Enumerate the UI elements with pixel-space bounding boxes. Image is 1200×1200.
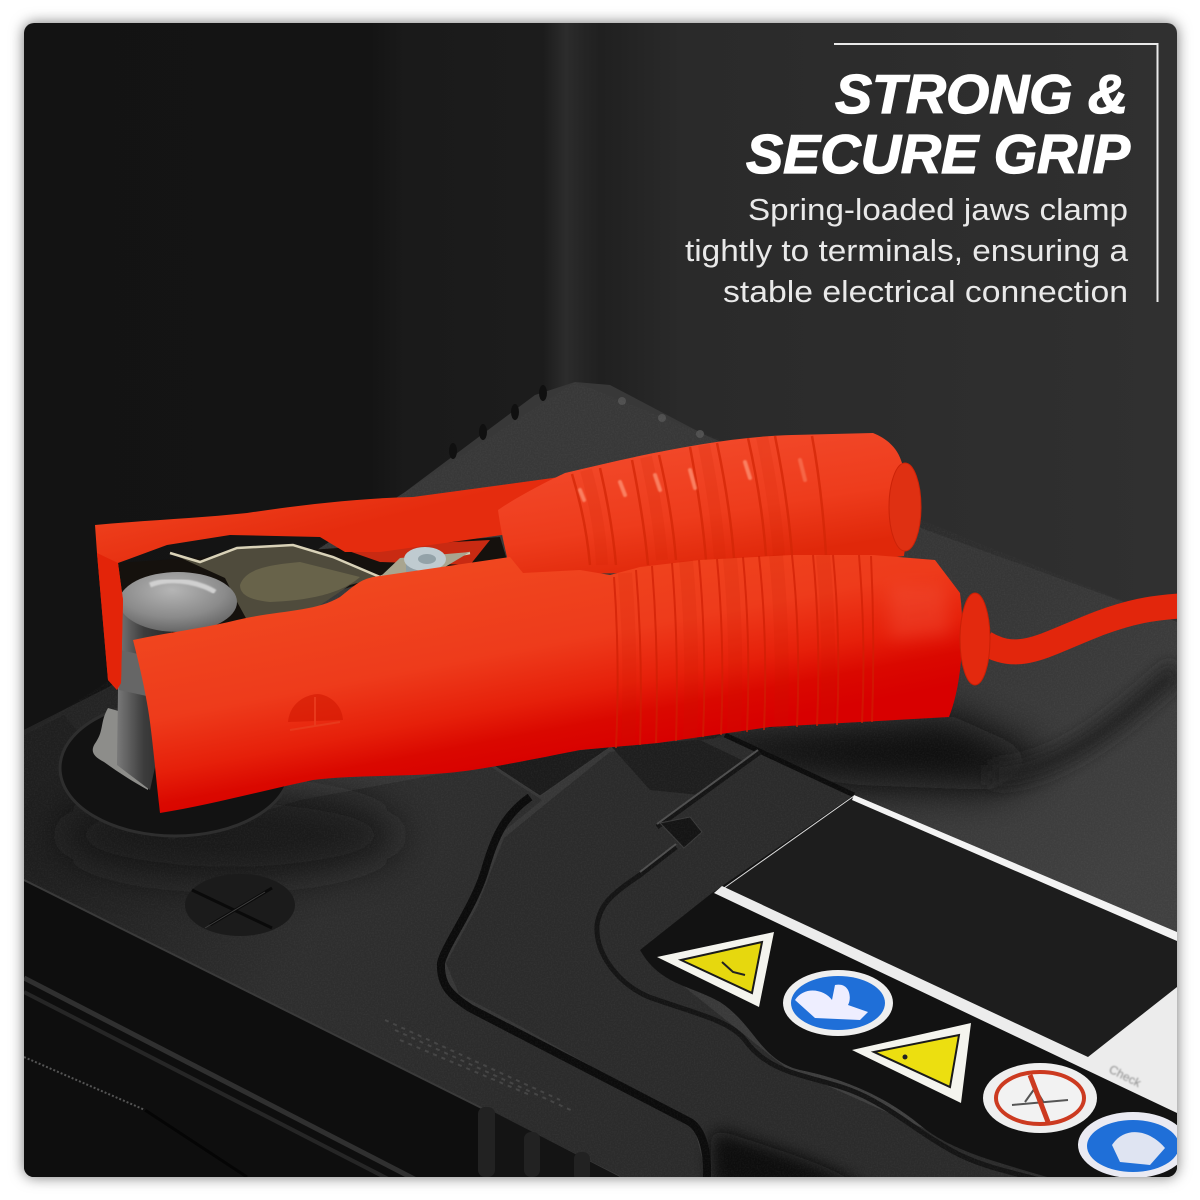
small tab [660,817,702,848]
label dark rectangle [724,797,1177,1057]
embossed lettering marks on battery [385,1020,575,1112]
lower handle cap sheen [890,585,950,640]
red clamp assembly [95,433,1180,813]
upper jaw cover [95,477,565,690]
prohibition circle [983,1063,1097,1133]
main left battery top surface [24,768,703,1177]
left dark area behind clamp [24,685,118,735]
description text: Spring-loaded jaws clamp [748,193,1128,227]
upper ridge bands [586,437,779,565]
description text: stable electrical connection [723,275,1128,309]
rear edge bumps [449,385,704,459]
plus symbol on clamp [288,694,343,730]
upper handle ridges [572,436,826,565]
headline [746,63,1130,185]
clamp cavity [218,537,506,624]
clamp cast shadow on battery [660,715,1050,790]
front black band [24,881,480,1177]
strain relief [960,593,990,685]
label small print: Check [1107,1062,1144,1091]
surface grain texture [24,382,1177,1177]
front ridges [24,880,620,1185]
terminal ground shadow [60,790,400,880]
lower handle [133,555,962,813]
lead terminal post [117,572,237,790]
screw [404,547,446,572]
description text [685,193,1128,309]
upper handle [498,433,907,575]
label top white border [852,795,1177,941]
dark notch block [610,740,748,795]
headline: SECURE GRIP [746,123,1130,185]
warning triangle 2 [852,1023,971,1103]
metal jaw [170,545,470,620]
upper handle end cap [889,463,921,551]
battery rear top surface [24,382,1177,1177]
safety circle: read manual [783,970,893,1036]
red inner strip [340,540,490,565]
headline: STRONG & [835,63,1128,125]
lower ridge bands [625,555,828,746]
headline corner rule [834,44,1158,302]
right panel of battery top [446,737,1047,1177]
battery terminal base disk [60,700,290,836]
teeth at bottom edge [478,1107,620,1182]
ledge shadow near clamp [725,735,854,795]
upper ridge highlights [580,460,805,500]
safety circle: protective gear [1078,1112,1177,1177]
warning label black panel [640,795,1188,1178]
groove [441,797,707,1177]
cable [985,606,1180,652]
cable shadow [1032,664,1177,778]
recess ridge line [597,752,1040,1180]
lower right dark hollow [706,1127,858,1177]
moulded circle mark on battery [185,874,295,936]
lower handle ridges [614,555,873,748]
warning triangle 1 [657,932,774,1007]
description text: tightly to terminals, ensuring a [685,234,1128,268]
dark block under clamp [496,748,609,796]
label white band [714,886,1177,1113]
upper jaw side flange shade [97,553,123,690]
